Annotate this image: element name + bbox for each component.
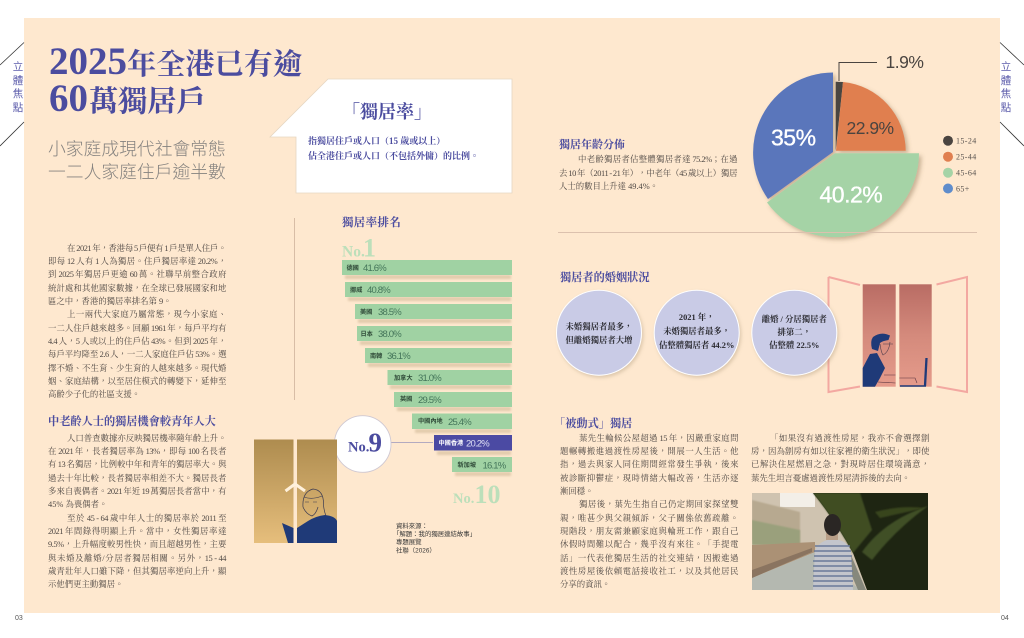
bar: Germany bbox=[342, 260, 512, 275]
text block: passive case left: 被診斷抑鬱症，現時情緒大幅改善，生活亦逐 bbox=[560, 474, 738, 483]
source note bbox=[393, 521, 476, 554]
text block: middle-aged: 在 2021 年，長者獨居率為 13%，即每 100 名長者 bbox=[48, 447, 226, 456]
circle callout: most unmarried bbox=[556, 290, 642, 375]
ranking marker: No.10 bbox=[453, 480, 500, 509]
ranking marker: No.10: 10 bbox=[474, 480, 500, 509]
bar shadows bbox=[345, 275, 511, 476]
leader line for 1.9% bbox=[839, 62, 877, 81]
bar: Canada: 31.0% bbox=[418, 373, 442, 384]
source note: 資料來源： bbox=[396, 521, 428, 530]
text block: intro: 上一兩代大家庭乃屬常態，現今小家庭、 bbox=[67, 310, 226, 319]
bar: Japan: 38.0% bbox=[378, 329, 402, 340]
text block: passive case left: 葉先生輪候公屋超過 15 年，因嚴重家庭問 bbox=[579, 434, 738, 443]
heading: passive living alone: 「被動式」獨居 bbox=[554, 418, 632, 430]
side tab label right: 體 bbox=[1001, 74, 1011, 86]
bar: USA: 美國 bbox=[360, 308, 372, 316]
bar: Germany: 德國 bbox=[346, 264, 359, 272]
circle callout: most unmarried: 未婚獨居者最多， bbox=[566, 322, 632, 332]
text block: middle-aged: 多來自喪偶者。2021 年近 19 萬獨居長者當中，有 bbox=[48, 487, 226, 496]
legend: age groups bbox=[943, 136, 977, 194]
heading: ranking: 獨居率排名 bbox=[342, 217, 401, 229]
circle callout: divorced share bbox=[752, 290, 837, 375]
side tab label left bbox=[13, 61, 23, 114]
ranking marker: No.10: No. bbox=[453, 491, 474, 507]
source note: 「解題：我的獨居連結故事」 bbox=[393, 529, 476, 538]
bar: Singapore: 16.1% bbox=[482, 460, 507, 472]
text block: passive case right bbox=[751, 434, 930, 483]
text block: middle-aged: 過去十年比較，長者獨居率相差不大。獨居長者 bbox=[48, 474, 226, 483]
bar: Norway bbox=[345, 282, 512, 297]
bar: Mainland China: 25.4% bbox=[448, 417, 472, 428]
text block: middle-aged: 歲青壯年人口雖下降，但其獨居率逆向上升，顯 bbox=[48, 567, 226, 576]
vertical divider bbox=[294, 218, 296, 400]
page number right: 04 bbox=[1001, 615, 1009, 622]
bar: Japan: 日本 bbox=[360, 330, 374, 338]
bar: USA bbox=[355, 304, 512, 319]
bar: South Korea: 南韓 bbox=[370, 352, 382, 360]
pie labels: 1.9% bbox=[886, 52, 923, 72]
arrow: No.9 callout connector bbox=[388, 442, 433, 444]
bar: South Korea: 36.1% bbox=[387, 351, 411, 362]
text block: passive case left: 獨居後，葉先生指自己仍定期回家探望雙 bbox=[579, 500, 738, 509]
legend: age groups: 65+ bbox=[956, 184, 970, 193]
text block: passive case left: 渡性房屋後依賴電話接收社工，以及其他居民 bbox=[560, 567, 738, 576]
bar: Mainland China: 中國內地 bbox=[418, 417, 444, 425]
text block: age distribution: 人士的數目上升達 49.4%。 bbox=[559, 182, 658, 191]
legend: age groups: 45-64 bbox=[956, 168, 977, 178]
No.9 badge: 9 bbox=[368, 428, 382, 458]
text block: middle-aged: 2021 年間錄得明顯上升。當中，女性獨居率達 bbox=[48, 527, 226, 536]
photo: man walking on path beside foliage bbox=[752, 493, 928, 590]
bar: Singapore: 新加坡 bbox=[458, 461, 477, 469]
subtitle bbox=[48, 139, 226, 182]
callout text: 佔全港住戶或人口（不包括外傭）的比例。 bbox=[308, 151, 479, 161]
bar: Singapore bbox=[452, 457, 512, 472]
bar: Mainland China bbox=[412, 414, 512, 429]
text block: intro: 高齡少子化的社區支援。 bbox=[48, 390, 140, 399]
text block: age distribution: 中老齡獨居者佔整體獨居者達 75.2%；在過 bbox=[578, 155, 737, 164]
text block: intro: 到 2025 年獨居戶更逾 60 萬。社聯早前整合政府 bbox=[48, 270, 226, 279]
bar: Norway: 挪威 bbox=[350, 286, 363, 294]
text block: passive case right: 「如果沒有過渡性房屋，我亦不會選擇劏 bbox=[770, 434, 929, 443]
pie chart: age distribution of solo dwellers bbox=[753, 52, 923, 237]
legend: age groups: 15-24 bbox=[956, 136, 977, 146]
text block: passive case left: 現階段，朋友需兼顧家庭與輪班工作，跟自己 bbox=[560, 527, 738, 536]
text block: intro: 4.4 人，5 人或以上的住戶佔 43%。但到 2025 年， bbox=[48, 337, 226, 346]
source note: 專題展覽 bbox=[396, 537, 422, 546]
bar: Hong Kong: 中國香港 bbox=[438, 439, 464, 447]
bar: UK: 29.5% bbox=[418, 395, 442, 406]
text block: intro bbox=[48, 244, 226, 399]
side tab label left: 點 bbox=[13, 102, 23, 114]
text block: middle-aged: 有 13 名獨居，比例較中年和青年的獨居率大。與 bbox=[48, 460, 226, 469]
page number left: 03 bbox=[15, 615, 23, 622]
text block: passive case left: 漸回穩。 bbox=[560, 487, 594, 496]
circle callout: divorced share: 排第二， bbox=[778, 327, 811, 337]
No.9 badge bbox=[334, 416, 391, 472]
text block: intro: 一二人住戶越來越多。回顧 1961 年，每戶平均有 bbox=[48, 324, 226, 333]
callout text: 指獨居住戶或人口（15 歲或以上） bbox=[308, 136, 445, 146]
side tab label right: 點 bbox=[1001, 102, 1011, 114]
pie chart: age distribution of solo dwellers: 22.9% bbox=[846, 118, 894, 138]
bar: USA: 38.5% bbox=[378, 307, 402, 318]
side tab decoration right bbox=[1000, 42, 1024, 146]
heading: middle-aged: 中老齡人士的獨居機會較青年人大 bbox=[48, 416, 216, 428]
divider bbox=[558, 232, 977, 234]
bar: Canada: 加拿大 bbox=[394, 374, 413, 382]
text block: passive case right: 房，因為劏房有如以往家裡的衛生狀況」，即使 bbox=[751, 447, 929, 456]
bar: South Korea bbox=[365, 348, 512, 363]
callout: definition box bbox=[270, 79, 512, 193]
callout text bbox=[308, 136, 479, 161]
heading: marital status: 獨居者的婚姻狀況 bbox=[560, 272, 650, 284]
No.9 badge: No. bbox=[348, 440, 369, 456]
text block: middle-aged: 人口普查數據亦反映獨居機率隨年齡上升。 bbox=[67, 434, 226, 443]
bar: UK bbox=[394, 392, 512, 407]
text block: passive case left: 題輾轉搬進過渡性房屋後，開展一人生活。他 bbox=[560, 447, 738, 456]
pie chart: age distribution of solo dwellers: 35% bbox=[771, 124, 816, 150]
ranking marker: No.1 bbox=[342, 234, 376, 262]
bar: Japan bbox=[357, 326, 512, 341]
text block: intro: 姻、家庭結構，以至居住模式的轉變下，延伸至 bbox=[48, 377, 226, 386]
bar: Hong Kong bbox=[434, 435, 512, 450]
illustration: woman reading by window bbox=[254, 440, 337, 543]
text block: intro: 在 2021 年，香港每 5 戶便有 1 戶是單人住戶。 bbox=[67, 244, 226, 253]
side tab label right: 立 bbox=[1001, 61, 1011, 73]
bar: Norway: 40.8% bbox=[367, 285, 391, 296]
text block: passive case right: 葉先生坦言憂慮過渡性房屋清拆後的去向。 bbox=[751, 474, 910, 483]
source note: 社聯（2026） bbox=[396, 546, 436, 554]
title: 60萬獨居戶 bbox=[49, 77, 206, 120]
text block: passive case left: 話」一代表他獨居生活的社交連結，因搬進過 bbox=[560, 554, 738, 563]
bar: Germany: 41.6% bbox=[363, 263, 387, 274]
circle callout: 2021 share bbox=[654, 290, 739, 375]
text block: passive case left: 親，唯甚少與父親傾訴，父子關係依舊疏離。 bbox=[560, 514, 738, 523]
callout heading: 「獨居率」 bbox=[342, 102, 432, 122]
circle callout: divorced share: 離婚 / 分居獨居者 bbox=[762, 314, 827, 324]
circle callout: 2021 share: 2021 年， bbox=[679, 312, 714, 322]
side tab label right bbox=[1001, 61, 1011, 114]
text block: middle-aged: 示他們更主動獨居。 bbox=[48, 580, 123, 589]
ranking marker: No.1: No. bbox=[342, 244, 365, 260]
text block: passive case left: 休假時間難以配合，幾乎沒有來往。「手提電 bbox=[560, 540, 738, 549]
bar chart: living alone rate ranking bbox=[342, 234, 512, 509]
text block: middle-aged: 與未婚及離婚/分居者獨居相關。另外，15 - 44 bbox=[48, 554, 226, 563]
text block: middle-aged: 45% 為喪偶者。 bbox=[48, 500, 107, 509]
pie chart: age distribution of solo dwellers: 40.2% bbox=[820, 182, 882, 208]
bar: Canada bbox=[388, 370, 512, 385]
text block: passive case left: 指，過去與家人同住期間經常發生爭執，後來 bbox=[560, 460, 738, 469]
subtitle: 一二人家庭住戶逾半數 bbox=[48, 162, 226, 182]
circle callout: 2021 share: 未婚獨居者最多， bbox=[663, 326, 730, 336]
text block: age distribution: 去 10 年（2011 - 21 年），中老年（45 歲以上）獨居 bbox=[559, 169, 737, 178]
side tab label left: 焦 bbox=[13, 88, 23, 100]
circle callout: 2021 share: 佔整體獨居者 44.2% bbox=[659, 340, 734, 350]
text block: intro: 即每 12 人有 1 人為獨居。住戶獨居率達 20.2%， bbox=[48, 257, 226, 266]
pie slices bbox=[753, 72, 919, 237]
side tab label right: 焦 bbox=[1001, 88, 1011, 100]
text block: intro: 每戶平均降至 2.6 人，一二人家庭住戶佔 53%。選 bbox=[48, 350, 226, 359]
title: 2025年全港已有逾 bbox=[49, 40, 302, 83]
text block: passive case left: 分享的資訊。 bbox=[560, 580, 610, 589]
heading: age distribution: 獨居年齡分佈 bbox=[559, 138, 625, 150]
legend: age groups: 25-44 bbox=[956, 152, 977, 162]
ranking marker: No.1: 1 bbox=[363, 234, 376, 262]
text block: middle-aged bbox=[48, 434, 226, 589]
bar: Hong Kong: 20.2% bbox=[466, 438, 490, 450]
illustration: man at laptop by window bbox=[828, 277, 967, 392]
circle callout: divorced share: 佔整體 22.5% bbox=[769, 340, 819, 350]
bar: UK: 英國 bbox=[400, 395, 412, 403]
side tab label left: 體 bbox=[13, 74, 23, 86]
text block: middle-aged: 至於 45 - 64 歲中年人士的獨居率於 2011 至 bbox=[67, 514, 226, 523]
text block: age distribution bbox=[559, 154, 738, 191]
text block: passive case right: 已解決住屋燃眉之急，對現時居住環境滿意， bbox=[751, 460, 929, 469]
side tab label left: 立 bbox=[13, 61, 23, 73]
text block: middle-aged: 9.5%，上升幅度較男性快，而且超越男性，主要 bbox=[48, 540, 226, 549]
circle callout: most unmarried: 但離婚獨居者大增 bbox=[566, 335, 632, 345]
text block: intro: 區之中，香港的獨居率排名第 9。 bbox=[48, 297, 172, 306]
side tab decoration left bbox=[0, 42, 24, 146]
text block: passive case left bbox=[560, 434, 738, 589]
text block: intro: 擇不婚、不生育、少生育的人越來越多。現代婚 bbox=[48, 364, 226, 373]
subtitle: 小家庭成現代社會常態 bbox=[48, 139, 226, 159]
title bbox=[49, 40, 302, 120]
text block: intro: 統計處和其他國家數據，在全球已發展國家和地 bbox=[48, 284, 226, 293]
